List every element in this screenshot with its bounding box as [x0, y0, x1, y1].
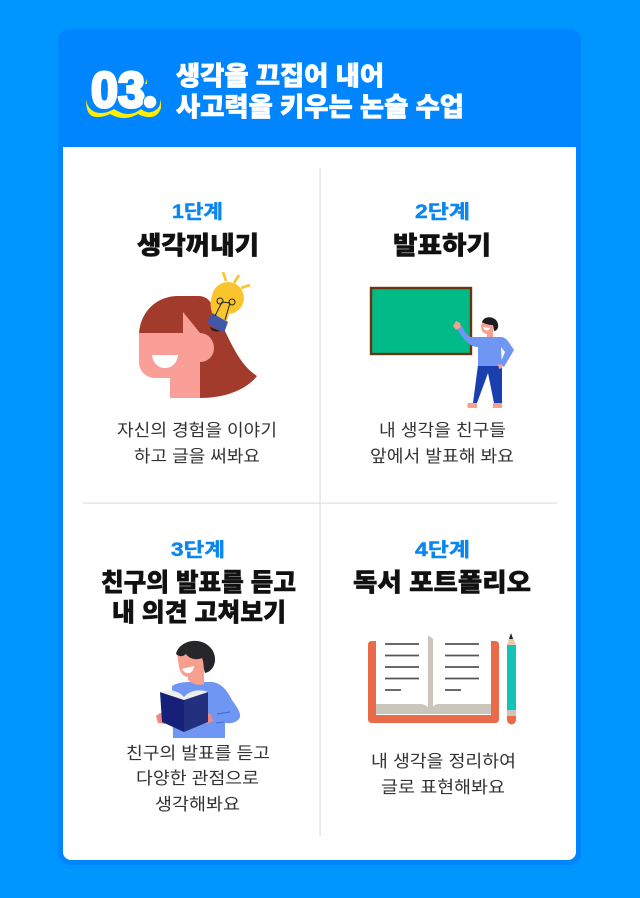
step 3 heading — [101, 569, 296, 627]
panel: step 4 — [353, 539, 531, 797]
step 2 description: 내 생각을 친구들 — [379, 421, 506, 440]
icon: blackboard — [371, 288, 471, 354]
step 1 description — [117, 421, 277, 466]
step 3 heading: 친구의 발표를 듣고 — [101, 569, 296, 597]
step 4 description — [371, 752, 516, 797]
step 1 label: 1단계 — [172, 201, 223, 223]
step 2 description: 앞에서 발표해 봐요 — [370, 447, 514, 466]
step 4 heading: 독서 포트폴리오 — [353, 569, 531, 597]
panel: step 3 — [101, 539, 296, 814]
step 3 description: 친구의 발표를 듣고 — [126, 744, 270, 763]
panel: white content area — [63, 147, 576, 860]
icon: pencil — [507, 633, 516, 724]
step 3 heading: 내 의견 고쳐보기 — [112, 599, 286, 627]
step 4 description: 내 생각을 정리하여 — [371, 752, 516, 771]
icon: student reading a book — [156, 641, 240, 738]
step 2 heading: 발표하기 — [393, 232, 491, 260]
dividers — [83, 168, 557, 836]
step 3 description — [126, 744, 270, 814]
step 4 label: 4단계 — [415, 539, 470, 561]
badge: number 03: 03 — [91, 62, 145, 118]
step 3 description: 다양한 관점으로 — [136, 769, 259, 788]
icon: presenting student — [453, 317, 514, 408]
step 2 description — [370, 421, 514, 466]
title: 생각을 끄집어 내어 — [176, 61, 384, 91]
panel: step 1 — [117, 201, 277, 466]
title — [176, 61, 464, 122]
step 1 description: 자신의 경험을 이야기 — [117, 421, 277, 440]
step 1 heading: 생각꺼내기 — [137, 232, 259, 260]
icon: open book — [368, 635, 499, 723]
step 4 description: 글로 표현해봐요 — [381, 778, 505, 797]
step 1 description: 하고 글을 써봐요 — [134, 447, 260, 466]
step 3 label: 3단계 — [171, 539, 225, 561]
step 3 description: 생각해봐요 — [155, 795, 240, 814]
panel: outer card — [58, 29, 581, 865]
step 2 label: 2단계 — [415, 201, 470, 223]
title: 사고력을 키우는 논술 수업 — [176, 92, 464, 122]
icon: head with light bulb — [139, 272, 257, 398]
panel: step 2 — [370, 201, 514, 466]
